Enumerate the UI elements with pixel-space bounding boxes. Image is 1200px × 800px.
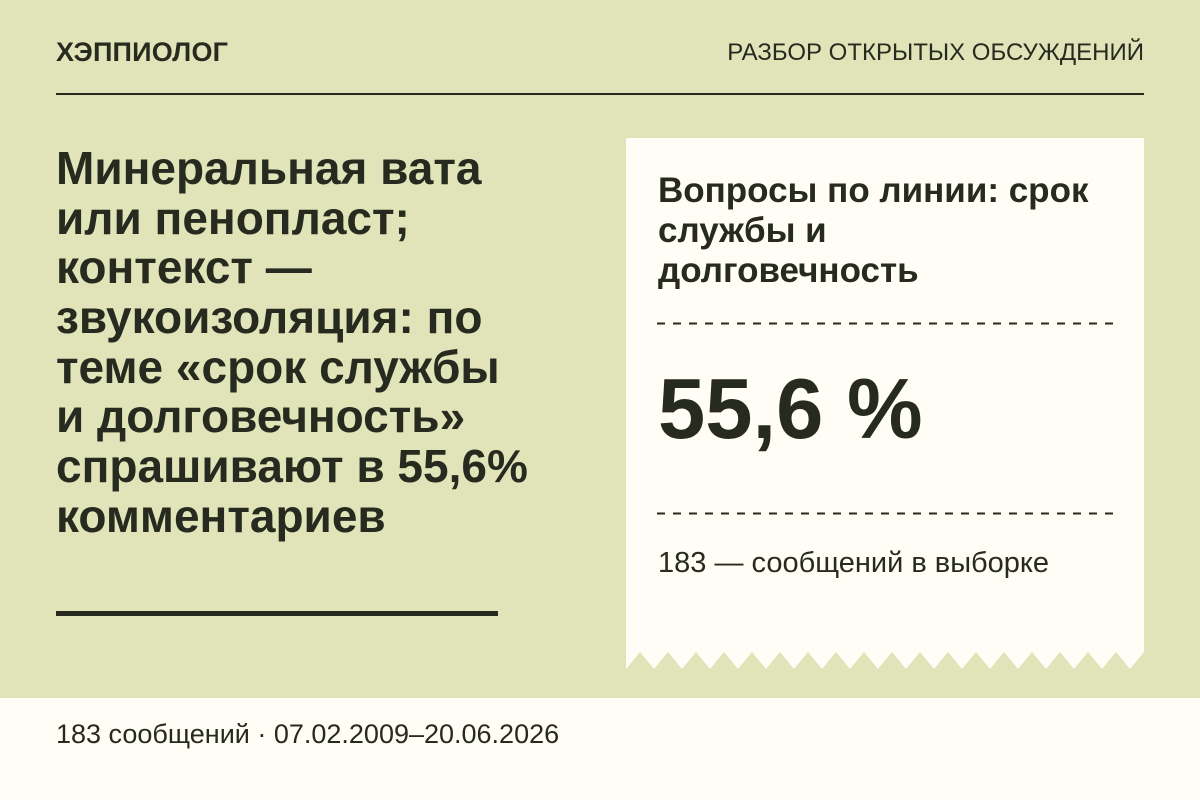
footer band [0, 698, 1200, 800]
card heading [658, 171, 1088, 290]
header rule [56, 93, 1144, 95]
main heading: и долговечность» [56, 390, 465, 442]
panel: receipt card [626, 138, 1144, 669]
main heading: или пенопласт; [56, 192, 410, 244]
main heading: комментариев [56, 490, 386, 542]
receipt shape [626, 138, 1144, 669]
header tag: РАЗБОР ОТКРЫТЫХ ОБСУЖДЕНИЙ [727, 39, 1144, 66]
dashed divider top [657, 322, 1113, 324]
heading underline [56, 611, 498, 616]
sample note: 183 — сообщений в выборке [658, 547, 1049, 579]
main heading [56, 142, 528, 542]
main heading: теме «срок службы [56, 341, 500, 393]
main heading: спрашивают в 55,6% [56, 440, 528, 492]
big number: 55,6 % [658, 362, 923, 457]
brand name: ХЭППИОЛОГ [56, 37, 228, 67]
footer text: 183 сообщений · 07.02.2009–20.06.2026 [56, 719, 559, 749]
card heading: службы и [658, 211, 827, 250]
card heading: Вопросы по линии: срок [658, 171, 1088, 210]
main heading: Минеральная вата [56, 142, 482, 194]
dashed divider bottom [657, 512, 1113, 514]
main heading: контекст — [56, 241, 312, 293]
main heading: звукоизоляция: по [56, 291, 482, 343]
card heading: долговечность [658, 251, 919, 290]
